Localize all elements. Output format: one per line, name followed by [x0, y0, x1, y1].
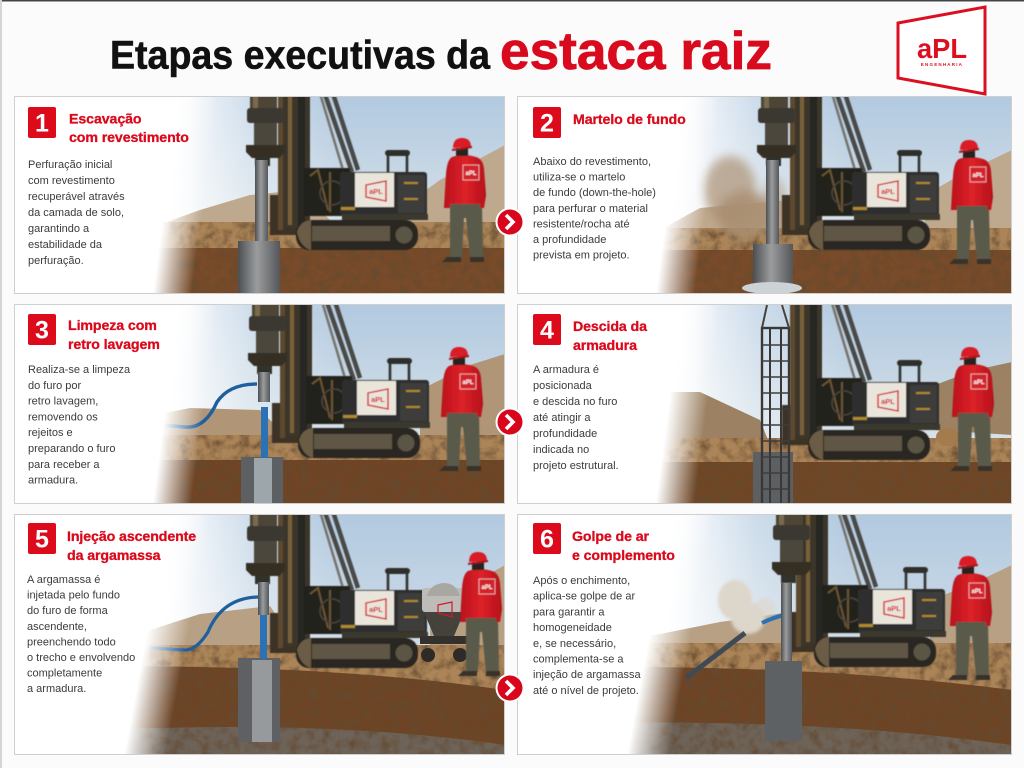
heading 4: armadura [573, 338, 637, 354]
body text 6: Após o enchimento, [533, 575, 630, 587]
body text 6: e, se necessário, [533, 638, 616, 650]
body text 6: homogeneidade [533, 622, 612, 634]
step badge 2 [533, 107, 561, 138]
title: Etapas executivas da [110, 34, 491, 78]
body text 4: até atingir a [533, 412, 591, 424]
photo: injeção de argamassa [126, 515, 504, 754]
body text 3: rejeitos e [28, 427, 73, 439]
heading 4: Descida da [573, 319, 647, 335]
body text 6: aplica-se golpe de ar [533, 591, 635, 603]
arrow: step 1 to 2 [496, 208, 524, 236]
body text 1: da camada de solo, [28, 207, 124, 219]
body text 1: recuperável através [28, 191, 125, 203]
grout mixer [420, 583, 468, 662]
body text 3: retro lavagem, [28, 396, 98, 408]
step badge 1: 1 [35, 110, 49, 138]
body text 2: para perfurar o material [533, 203, 648, 215]
body text 3: removendo os [28, 411, 98, 423]
arrow: step 5 to 6 [496, 674, 524, 702]
body text 2: utiliza-se o martelo [533, 172, 625, 184]
photo: descida da armadura [658, 305, 1011, 503]
photo: perfuração com revestimento [154, 97, 504, 293]
body text 4: posicionada [533, 380, 593, 392]
title [110, 22, 772, 81]
panel 5: injeção ascendente da argamassa [14, 514, 505, 755]
body text 5: injetada pelo fundo [27, 590, 120, 602]
arrow: step 3 to 4 [496, 408, 524, 436]
body text 4: profundidade [533, 428, 597, 440]
body text 6: injeção de argamassa [533, 669, 642, 681]
body text 1: com revestimento [28, 175, 115, 187]
body text 6: para garantir a [533, 606, 605, 618]
body text 6: complementa-se a [533, 654, 624, 666]
heading 5: Injeção ascendente [67, 529, 196, 545]
step badge 3 [28, 314, 56, 345]
photo: martelo de fundo com poeira [658, 97, 1011, 293]
heading 6: e complemento [572, 548, 675, 564]
body text 1: estabilidade da [28, 239, 103, 251]
step badge 6 [533, 523, 561, 554]
logo: APL Engenharia [898, 7, 985, 94]
body text 3: do furo por [28, 380, 82, 392]
body text 1: perfuração. [28, 255, 84, 267]
heading 2: Martelo de fundo [573, 112, 686, 128]
photo: golpe de ar [630, 515, 1011, 754]
step badge 2: 2 [540, 110, 554, 138]
step badge 4: 4 [540, 316, 554, 344]
step badge 4 [533, 314, 561, 345]
step badge 1 [28, 107, 56, 138]
body text 5: ascendente, [27, 621, 87, 633]
body text 4: indicada no [533, 444, 589, 456]
body text 5: completamente [27, 668, 102, 680]
step badge 6: 6 [540, 526, 554, 554]
body text 5: o trecho e envolvendo [27, 652, 135, 664]
panel 4: descida da armadura [517, 304, 1012, 504]
body text 6: até o nível de projeto. [533, 685, 639, 697]
heading 1: Escavação [69, 112, 142, 128]
casing and reinforcement cage [753, 305, 793, 504]
body text 1: Perfuração inicial [28, 159, 112, 171]
panel 6: golpe de ar e complemento [517, 514, 1012, 755]
panel 3: limpeza com retro lavagem [14, 304, 505, 504]
body text 2: de fundo (down-the-hole) [533, 187, 656, 199]
body text 3: armadura. [28, 475, 78, 487]
body text 5: do furo de forma [27, 605, 109, 617]
body text 2: prevista em projeto. [533, 250, 630, 262]
logo: APL Engenharia: ENGENHARIA [921, 62, 963, 67]
step badge 5: 5 [35, 526, 49, 554]
body text 4: e descida no furo [533, 396, 617, 408]
heading 3: Limpeza com [68, 318, 157, 334]
body text 3: Realiza-se a limpeza [28, 364, 131, 376]
air blast cloud [718, 580, 776, 634]
body text 2: Abaixo do revestimento, [533, 156, 651, 168]
body text 3: para receber a [28, 459, 100, 471]
heading 6: Golpe de ar [572, 529, 650, 545]
heading 3: retro lavagem [68, 337, 160, 353]
body text 5: a armadura. [27, 683, 86, 695]
body text 5: preenchendo todo [27, 636, 116, 648]
step badge 5 [28, 523, 56, 554]
heading 5: da argamassa [67, 548, 161, 564]
panel 2: martelo de fundo [517, 96, 1012, 294]
title: estaca raiz [500, 22, 772, 81]
body text 2: resistente/rocha até [533, 218, 630, 230]
body text 5: A argamassa é [27, 574, 100, 586]
heading 1: com revestimento [69, 130, 189, 146]
body text 3: preparando o furo [28, 443, 115, 455]
logo: APL Engenharia: aPL [917, 33, 967, 64]
panel 1: escavação com revestimento [14, 96, 505, 294]
dust cloud [704, 156, 787, 239]
body text 4: projeto estrutural. [533, 460, 619, 472]
photo: retro lavagem [154, 305, 504, 503]
body text 1: garantindo a [28, 223, 90, 235]
body text 4: A armadura é [533, 364, 599, 376]
body text 2: a profundidade [533, 234, 606, 246]
step badge 3: 3 [35, 316, 49, 344]
